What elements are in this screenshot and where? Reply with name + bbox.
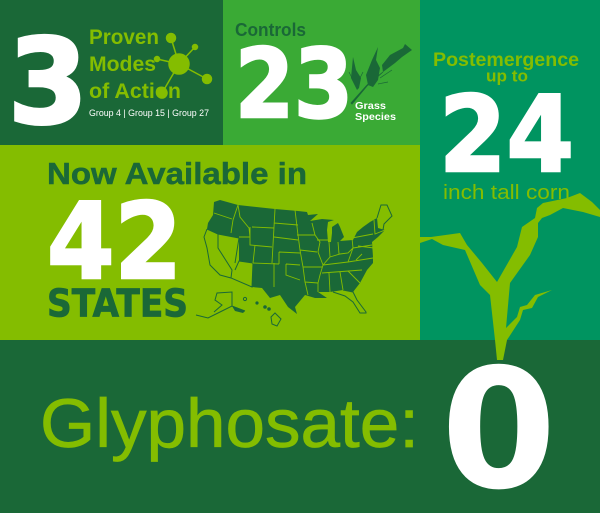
icon: corn plant [420,193,600,360]
label: states: STATES [47,282,188,326]
group list: Group 4 | Group 15 | Group 27 [89,108,209,118]
label: glyphosate: Glyphosate: [40,385,419,462]
number 23: 23 [235,30,353,140]
panel: grass species [223,0,420,145]
heading: controls: Controls [235,20,306,40]
heading: postemergence: up to [486,66,528,86]
label: inch tall corn: inch tall corn [443,182,570,204]
number 24: 24 [439,74,574,196]
icon: molecule [154,34,212,98]
label: grass species: Grass [355,100,386,112]
alaska [196,292,245,318]
heading: proven modes of action: Proven [89,26,159,49]
heading: postemergence: Postemergence [433,50,579,71]
map: united states [196,200,392,326]
heading: now available: Now Available in [47,157,307,191]
heading: postemergence [433,50,579,86]
heading: proven modes of action: of Action [89,80,181,103]
number 3: 3 [8,13,88,151]
florida [333,290,366,313]
heading: proven modes of action [89,26,181,103]
main dark states [207,200,385,314]
maine [377,205,392,230]
panel: states [0,145,420,340]
panel: modes of action [0,0,223,151]
outlined western states [204,229,253,287]
icon: grass [349,44,412,104]
label: grass species [355,100,396,123]
number 42: 42 [47,181,182,303]
panel: corn height [420,0,600,360]
heading: proven modes of action: Modes [89,53,156,76]
label: grass species: Species [355,111,396,123]
hawaii [243,297,281,326]
